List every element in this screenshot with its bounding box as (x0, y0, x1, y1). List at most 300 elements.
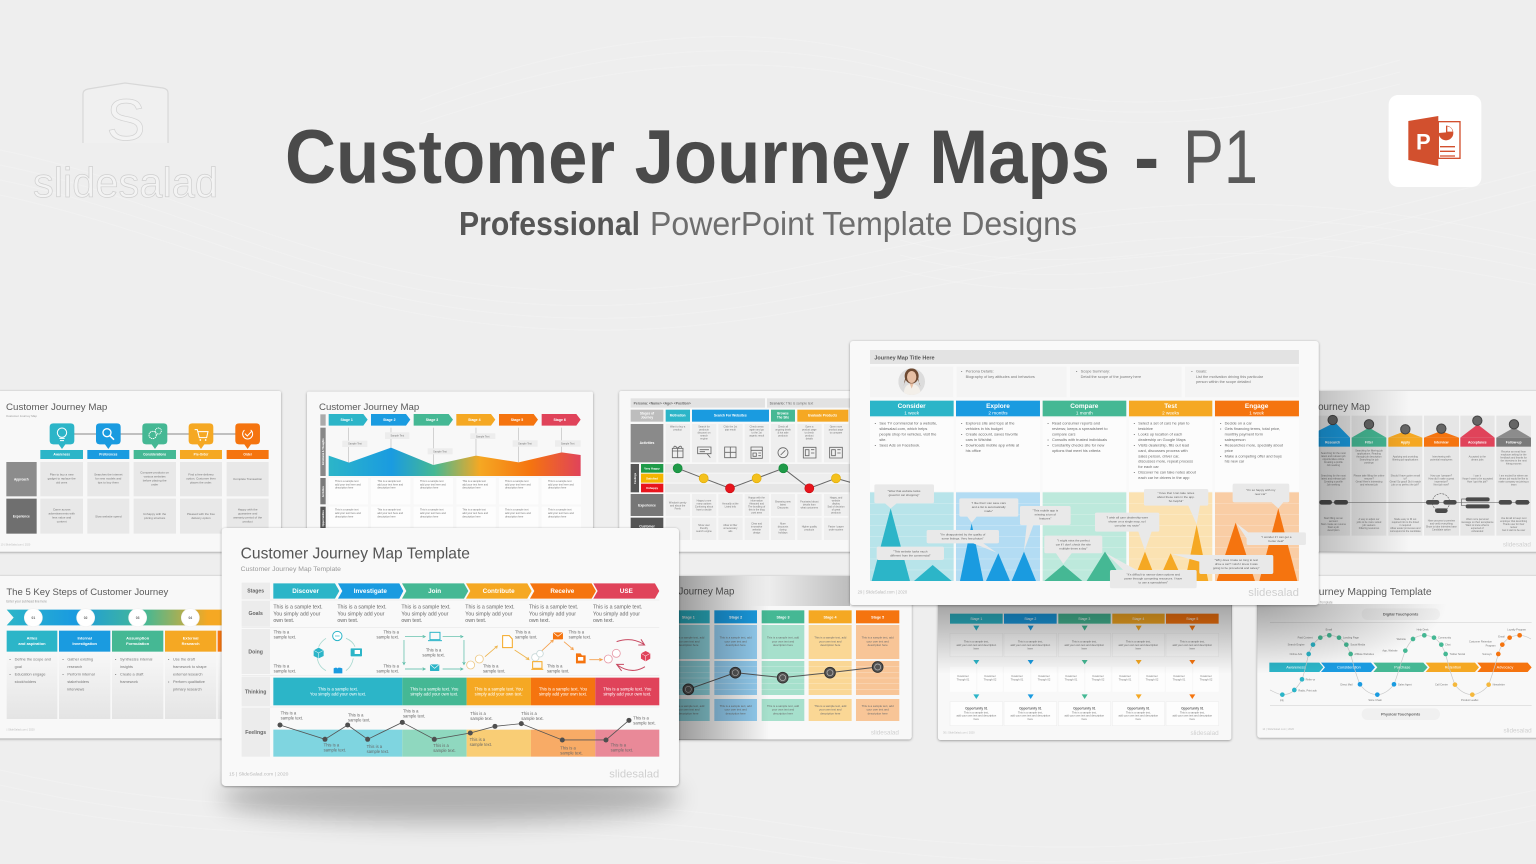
stage bullet lists: vehicles in his budget (966, 426, 1004, 431)
stage headers: Stage 4 (823, 615, 837, 619)
journey text: Job seeking (1327, 484, 1341, 487)
stage arrows: Stage 5 (511, 418, 523, 422)
speech bubbles (874, 484, 1306, 588)
thinking bars: simply add your own text. (410, 692, 458, 697)
thought cards: Though 02 (1092, 677, 1105, 681)
step cards: • (115, 672, 117, 676)
experience and customer rows: Faster / paper (828, 526, 844, 529)
goals text: You simply add your (273, 611, 321, 617)
emotion line (683, 662, 883, 695)
stage bullet lists: cars in Wishlist (966, 437, 992, 442)
goals text: You simply add your (593, 611, 640, 617)
journey cells: advertisements with (48, 512, 75, 516)
panel: main slide ambient shadow (220, 771, 680, 823)
tinted rows: your own text and (724, 708, 747, 712)
thinking bars: simply add your own text. (603, 692, 651, 697)
journey text: and verify everything (1430, 523, 1453, 526)
speech bubbles: features" (1039, 517, 1051, 521)
speech bubbles: going to be procedural and salesy" (1213, 566, 1260, 570)
panel: main customer journey map template slide (222, 528, 679, 786)
touchpoint dots: Social Media (1350, 643, 1366, 647)
row labels: Goals (248, 611, 263, 617)
speech bubbles: to use a spreadsheet" (1139, 581, 1168, 585)
speech bubbles: "Why does it take so long to test (1215, 558, 1258, 562)
row headers: Approach (14, 477, 29, 481)
activities row: Check all (778, 426, 788, 429)
journey text: I can it (1474, 475, 1481, 478)
journey cells: Plan to buy a new (50, 473, 74, 477)
journey text: Searching for the most (1321, 475, 1346, 478)
journey text: job or so perfect the job? (1391, 484, 1420, 487)
step cards: interviews (67, 687, 84, 691)
journey cells: Complete Transaction (233, 477, 262, 481)
experience and customer rows: design (753, 531, 761, 534)
step cards: Use the draft (173, 657, 196, 661)
step cards: Research (182, 641, 200, 646)
journey text: message on their acceptance (1461, 521, 1494, 524)
activities cards: description here (420, 514, 439, 518)
panel: main customer journey map template slide: Customer Journey Map Template (241, 566, 342, 573)
process pills (1319, 494, 1530, 513)
slide footer: 10 | SlideSalad.com | 2020 (1, 543, 31, 546)
stage bullet lists: Read consumer reports and (1052, 421, 1100, 426)
opportunity cards: add your own text and description (1172, 714, 1213, 718)
goals text: own text. (337, 618, 358, 624)
journey text: filtering job applications (1392, 459, 1419, 462)
tinted rows: description here (726, 643, 746, 647)
feelings line chart: This is a (367, 744, 382, 749)
row labels (320, 414, 326, 528)
stage labels: Order (243, 453, 253, 457)
experience and customer rows: Discounts (778, 506, 789, 509)
panel: slide 5 key steps (0, 576, 231, 738)
opportunity cards: here (974, 717, 980, 721)
description cards: here (1082, 646, 1087, 650)
activities row: ongoing deals (775, 429, 791, 432)
journey cells: Compare products on (140, 471, 169, 475)
experience and customer rows (631, 494, 848, 540)
thinking bars: This is a sample text. You (603, 687, 651, 692)
opportunity cards: here (1190, 717, 1195, 721)
activities row: to compare (830, 432, 843, 435)
area chart: Sample Text (391, 435, 404, 438)
stage arrows: Stage 6 (553, 418, 566, 422)
activities cards: This is a sample text (548, 509, 571, 512)
stage arrows: Investigate (354, 588, 387, 595)
stage bullet lists: site. (879, 437, 886, 442)
hero shadow on follow-up slide (1319, 391, 1409, 552)
persona header: Persona: <Name> <Age> <Position> (634, 401, 691, 405)
description cards: This is a sample text, (1180, 641, 1205, 644)
touchpoint dots: Online Ads (1290, 652, 1303, 656)
persona header (631, 398, 850, 408)
thought cards: Customer (1146, 675, 1158, 678)
stage headers (870, 401, 1299, 416)
journey cells (40, 462, 269, 534)
step cards: Assumption (126, 635, 149, 640)
feelings line chart: sample text. (367, 749, 389, 754)
speech bubbles: can plan my route" (1115, 523, 1140, 527)
stage bullet lists: Constantly checks site for new (1052, 442, 1105, 447)
slide heading: The 5 Key Steps of Customer Journey (6, 587, 169, 597)
activities row: Open more (830, 426, 842, 429)
activities row: product page (829, 429, 844, 432)
stage bullet lists: • (1134, 421, 1135, 426)
journey text: Get it start to be user (1502, 529, 1525, 532)
speech bubbles: "I wonder if I can get a (1261, 535, 1291, 539)
thinking bars: simply add your own text. (539, 692, 587, 697)
journey text: postings (1364, 462, 1374, 465)
journey text: description (1327, 529, 1340, 532)
journey text: How can I prepare? (1430, 475, 1452, 478)
speech bubbles: great for car shopping" (889, 493, 919, 497)
slide footer: | SlideSalad.com | 2020 (7, 728, 35, 732)
journey text: Searching for the most (1321, 452, 1346, 455)
stage headers: Engage (1245, 403, 1269, 410)
logo: slidesalad embossed (33, 83, 218, 206)
feelings line chart: This is a (403, 709, 418, 714)
title: - (1134, 115, 1159, 200)
journey text: onboarded (1471, 530, 1484, 533)
row labels: Emotional & Thoughts (322, 438, 325, 465)
touchpoint dots: Help Desk (1417, 627, 1429, 631)
goals text: own text. (593, 618, 614, 624)
doing notes: sample text. (274, 669, 296, 674)
activities cards: description here (335, 514, 354, 518)
peaks and stage labels: Acceptance (1468, 440, 1487, 444)
stage bullet lists: • (1220, 426, 1222, 431)
feelings line chart (273, 709, 659, 757)
tinted rows: description here (868, 643, 888, 647)
activities cards: add your text here and (548, 482, 574, 486)
persona row: List the motivation driving this particular (1196, 375, 1264, 379)
tinted rows: your own text and (866, 639, 889, 643)
thought cards: Though 01 (1173, 677, 1186, 681)
stage headers: 1 week (904, 410, 920, 415)
journey text: opportunities online (1323, 458, 1345, 461)
journey cells: product (243, 520, 253, 524)
touchpoint dots: Product Leaflet (1461, 698, 1479, 702)
thought cards: Though 02 (1038, 677, 1051, 681)
stage row: Journey (641, 415, 653, 419)
persona row: • (961, 369, 962, 373)
journey text: Applying and providing (1393, 456, 1418, 459)
thought cards: Customer (957, 675, 969, 678)
step cards: Create a draft (120, 672, 144, 676)
feelings row: Unhappy (646, 486, 658, 490)
step cards: • (168, 680, 170, 684)
stage headers: Test (1164, 403, 1178, 410)
step cards: stakeholders (67, 680, 89, 684)
opportunity cards: Opportunity 01 (1019, 707, 1042, 711)
journey text: required info to the listed (1392, 521, 1420, 524)
experience and customer rows: Confusing about (695, 506, 713, 509)
panel: slide follow-up journey map (1243, 391, 1536, 552)
touchpoint curve (1270, 635, 1531, 695)
stage bullet lists: Discover he can take notes about (1138, 470, 1197, 475)
speech bubbles: "I like that I can save cars (971, 501, 1006, 505)
slide footer: 15 | SlideSalad.com | 2020 (229, 771, 289, 777)
opportunity cards: Opportunity 01 (1127, 707, 1150, 711)
row labels: Doing (248, 649, 263, 655)
stage headers: Stage 3 (1078, 617, 1090, 621)
slide heading: Customer Journey Map (319, 402, 419, 412)
journey text: dream job would be like to (1499, 478, 1529, 481)
opportunity cards: add your own text and description (956, 714, 997, 718)
journey cells: before placing the (143, 479, 167, 483)
persona avatar (898, 368, 925, 395)
activities cards: This is a sample text (335, 480, 358, 483)
activities row: discount on (698, 432, 711, 435)
goals text: own text. (529, 618, 550, 624)
activities cards: This is a sample text (377, 509, 401, 512)
step cards: Education engage (15, 672, 46, 676)
stage arrows (1269, 663, 1532, 672)
journey text: and relevant job (1360, 484, 1378, 487)
stage bullet lists: people shop for vehicles, visit the (879, 432, 936, 437)
stage bullet lists: • (1134, 470, 1136, 475)
stage bullet lists: • (875, 421, 876, 426)
touchpoint dots: Radio, Print ads (1298, 688, 1317, 692)
tinted rows: description here (820, 711, 841, 715)
stage bullet lists: testdrive (1138, 426, 1153, 431)
feelings line chart: sample text. (470, 742, 492, 747)
row labels: Opportunities (322, 510, 325, 526)
description cards: This is a sample text, (1072, 641, 1097, 644)
journey text: in required (1399, 524, 1412, 527)
persona header: Scenario: This is sample text (770, 401, 813, 405)
touchpoint dots: Refer-ur (1306, 677, 1315, 681)
panel: slide journey mapping template: Template (1320, 600, 1333, 604)
activities row: Open a (805, 426, 813, 429)
icon: PowerPoint: P (1416, 129, 1431, 154)
slide heading: Customer Journey Mapping Template (1260, 587, 1432, 598)
journey text: job seekers (1362, 524, 1376, 527)
journey text: Job seeking (1327, 464, 1341, 467)
activities cards: add your text here and (420, 482, 446, 486)
main slide shadow on stage map (679, 576, 769, 740)
connector arrow (73, 432, 236, 435)
activities cards: add your text here and (505, 482, 531, 486)
stage bullet lists: • (1134, 442, 1136, 447)
thought cards: Customer (1092, 675, 1104, 678)
touchpoint dots: Paid Content (1298, 636, 1313, 640)
experience and customer rows: website (752, 528, 761, 531)
doing notes: This is a (569, 630, 584, 635)
stage arrows: Discover (292, 588, 320, 595)
journey cells: Happy with the (238, 508, 258, 512)
panel: slide persona grid (619, 391, 855, 552)
tinted rows: your own text and (866, 708, 889, 712)
journey cells: Unhappy with the (143, 512, 166, 516)
step cards: Allies (27, 635, 37, 640)
experience and customer rows: Allow to filter (723, 524, 737, 527)
experience and customer rows: website (832, 499, 841, 502)
speech bubbles: different from the commercial" (890, 553, 931, 557)
goals text: This is a sample text. (273, 605, 323, 611)
stage headers: 2 weeks (1162, 410, 1180, 415)
step cards: and aspiration (18, 641, 46, 646)
stage bullet lists: Downloads mobile app while at (966, 442, 1020, 447)
activities row: product page (802, 429, 817, 432)
thought cards: Though 02 (984, 677, 997, 681)
stage labels: Preferences (99, 453, 118, 457)
stage headers: Consider (898, 403, 926, 410)
activities cards: description here (505, 514, 524, 518)
feelings line chart: This is a (470, 711, 486, 716)
thought cards: Though 01 (1011, 677, 1024, 681)
journey text: review (1510, 526, 1517, 529)
step cards: • (62, 657, 64, 661)
panel: slide opportunity map (938, 587, 1231, 740)
stage bullet lists: each car he drivers in the app (1138, 475, 1189, 480)
tinted rows: description here (773, 711, 793, 715)
tinted rows: This is a sample text, add (862, 636, 894, 640)
area chart: Sample Text (518, 442, 532, 445)
opportunity cards: add your own text and description (1118, 714, 1159, 718)
tinted rows: description here (678, 643, 699, 647)
icon: PowerPoint (1389, 95, 1481, 187)
journey text: Start a job (1328, 526, 1340, 529)
activities cards: add your text here and (548, 511, 574, 515)
stage bullet lists: • (875, 442, 877, 447)
journey text: potential employees (1430, 459, 1453, 462)
doing notes: sample text. (569, 635, 591, 640)
speech bubbles: about these cars in the app. (1157, 495, 1195, 499)
stage row (631, 410, 848, 422)
peak chart backgrounds (870, 492, 1299, 581)
touchpoint pills: Digital Touchpoints (1383, 613, 1418, 617)
touchpoint dots: Website (1397, 637, 1406, 641)
journey text: I hope I want to be accepted (1462, 478, 1494, 481)
experience and customer rows: and about the (670, 504, 686, 507)
step cards: Gather existing (67, 657, 93, 661)
journey text: Great! Here's interesting (1356, 481, 1383, 484)
tinted rows: description here (820, 643, 841, 647)
journey text: the interview in the next (1501, 459, 1527, 462)
subtitle: Professional (459, 205, 640, 242)
thought cards: Though 01 (1119, 677, 1132, 681)
stage bullet lists: Researches more, specially about (1225, 442, 1284, 447)
touchpoint dots: Chat (1445, 643, 1451, 647)
logo: slidesalad embossed: S (107, 88, 145, 153)
watermark: slidesalad (1503, 541, 1531, 548)
step cards: • (115, 657, 116, 661)
journey cells: pricing structure (144, 516, 166, 520)
stage bullet lists: Make a competing offer and buys (1225, 453, 1282, 458)
tinted rows: your own text and (819, 639, 842, 643)
activities cards: This is a sample text (505, 480, 528, 483)
tinted rows: This is a sample text, add (767, 636, 799, 640)
feelings row: Feelings (633, 472, 637, 484)
goals text: You simply add your (337, 611, 385, 617)
touchpoint dots: Email (1498, 634, 1505, 638)
numbered banner: 03 (136, 616, 140, 620)
stage bullet lists: card, discusses process with (1138, 448, 1188, 453)
stage arrows (273, 583, 659, 599)
speech bubbles: missing a ton of (1035, 513, 1056, 517)
activities cards: add your text here and (377, 482, 404, 486)
thought cards (950, 667, 1219, 692)
stage headers: Stage 5 (1186, 617, 1198, 621)
journey text: to? (1404, 478, 1408, 481)
activities row: product (805, 435, 814, 438)
row headers: Experience (13, 514, 30, 518)
feelings line chart: sample text. (633, 720, 656, 725)
journey text: Allow easier processes and (1390, 527, 1421, 530)
thinking bars: This is a sample text. You (410, 687, 458, 692)
speech bubbles: shown on a single map, so I (1108, 519, 1146, 523)
stage headers: Stage 5 (871, 615, 884, 619)
panel: slide customer journey icons: Customer Journey Map (6, 414, 37, 418)
experience and customer rows: Happy, and (830, 496, 842, 499)
touchpoint pills: Physical Touchpoints (1381, 713, 1420, 717)
activities row: to the 1st (752, 432, 762, 435)
activities row (631, 424, 848, 462)
doing notes: This is a (426, 648, 441, 653)
hero shadow on opportunity map (938, 604, 1232, 674)
stage bullet lists: price (1225, 448, 1233, 453)
stage bullet lists: his office (966, 448, 981, 453)
stage headers: 2 months (988, 410, 1008, 415)
goals text: This is a sample text. (401, 605, 451, 611)
journey text: employer asking for the (1501, 453, 1527, 456)
thought cards: Customer (1065, 675, 1077, 678)
activities cards: add your text here and (335, 511, 361, 515)
opportunity cards: Opportunity 01 (1073, 707, 1096, 711)
panel: hero journey map slide (850, 341, 1319, 605)
journey text: employer that describing (1500, 520, 1528, 523)
touchpoint dots: Twitter Social (1450, 652, 1465, 656)
feelings line chart: This is a (633, 715, 649, 720)
persona row: Scope Summary: (1081, 369, 1110, 373)
peak triangles (872, 508, 1297, 581)
activities cards: description here (335, 486, 354, 490)
description cards: here (1028, 646, 1033, 650)
thinking bars (273, 678, 659, 705)
experience and customer rows: Customer (639, 525, 655, 529)
speech bubbles: "I love that I can take notes (1158, 491, 1194, 495)
description cards: here (1190, 646, 1195, 650)
activities cards: This is a sample text (377, 480, 401, 483)
thinking bars: This is a sample text. You (539, 687, 587, 692)
stage bullet lists: options that meet his criteria (1052, 448, 1101, 453)
stage headers: Compare (1070, 403, 1099, 410)
description cards: add your own text and description (956, 643, 997, 647)
stage bullet lists (870, 418, 1299, 491)
touchpoint dots: Surveys (1482, 652, 1492, 656)
icon: pre-order cart (189, 423, 213, 449)
speech bubbles: car if I don't check the site (1056, 542, 1091, 546)
stage bullet lists: compare cars (1052, 432, 1076, 437)
area chart (329, 428, 581, 476)
description cards: add your own text and description (1172, 643, 1213, 647)
journey text: Creating a profile (1324, 461, 1343, 464)
stage headers (665, 610, 899, 623)
stage labels: Pre-Order (194, 453, 209, 457)
journey cells: guarantee and (238, 512, 258, 516)
persona row: Detail the scope of the journey here (1081, 375, 1141, 379)
numbered banner: 02 (84, 616, 88, 620)
speech bubbles: some listings. Very few photos" (942, 537, 984, 541)
icon: considerations gears (142, 423, 167, 449)
experience and customer rows: Happy to see (697, 500, 711, 503)
peaks and stage labels (1303, 415, 1531, 447)
slide heading: Customer Journey Map (634, 586, 734, 597)
persona row: Persona Details: (966, 369, 994, 373)
stage row: Search For Websites (714, 414, 747, 418)
thought cards: Though 02 (1146, 677, 1159, 681)
